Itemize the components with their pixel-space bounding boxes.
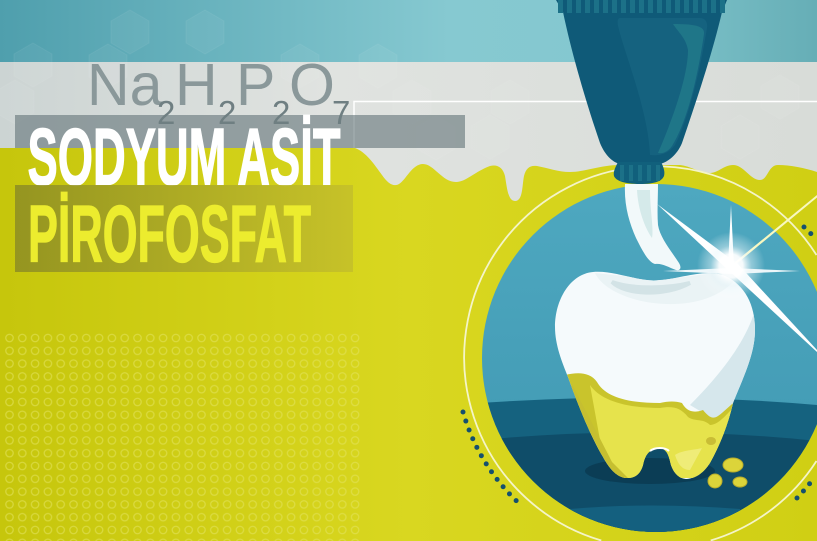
tooth shading	[690, 310, 755, 420]
chemical formula: P	[236, 52, 275, 118]
toothpaste shading	[637, 190, 653, 238]
tartar pebbles	[708, 458, 747, 488]
chemical formula: H	[175, 52, 218, 118]
dot pattern panel	[3, 332, 362, 541]
background: hexagon pattern	[0, 10, 799, 160]
title: second line: PİROFOSFAT	[28, 190, 311, 280]
tube crimp ribs	[558, 0, 725, 13]
background: teal band	[0, 0, 817, 63]
toothpaste	[625, 184, 680, 270]
chemical formula: O	[289, 52, 335, 118]
tube neck	[614, 162, 664, 184]
white ring	[464, 166, 816, 540]
tooth notch highlight	[650, 448, 669, 451]
gray title bar	[15, 115, 465, 148]
background: yellow dripping field	[0, 148, 817, 541]
dotted arcs	[463, 227, 814, 507]
tube neck ribs	[620, 165, 660, 181]
tube reflection	[658, 24, 704, 153]
chemical formula: Na	[87, 52, 163, 118]
chemical formula: 2	[272, 94, 290, 131]
chemical formula: 2	[218, 94, 236, 131]
stain light patch	[675, 448, 702, 470]
chemical formula: 2	[157, 94, 175, 131]
chemical formula: 7	[332, 94, 350, 131]
tube	[556, 0, 727, 184]
illustration disc	[480, 183, 817, 533]
olive title box	[15, 185, 353, 272]
tube highlight	[618, 18, 707, 155]
tooth	[555, 272, 755, 479]
stain dark edge	[570, 384, 628, 478]
background: gray band	[0, 62, 817, 207]
tooth shadow	[585, 458, 715, 484]
chemical formula	[87, 52, 350, 131]
white outline frame	[354, 102, 817, 148]
title: first line: SODYUM ASİT	[28, 112, 340, 202]
sparkle	[657, 195, 817, 352]
ground layers	[480, 397, 817, 533]
yellow stain	[565, 373, 736, 478]
tartar bump	[706, 437, 716, 445]
